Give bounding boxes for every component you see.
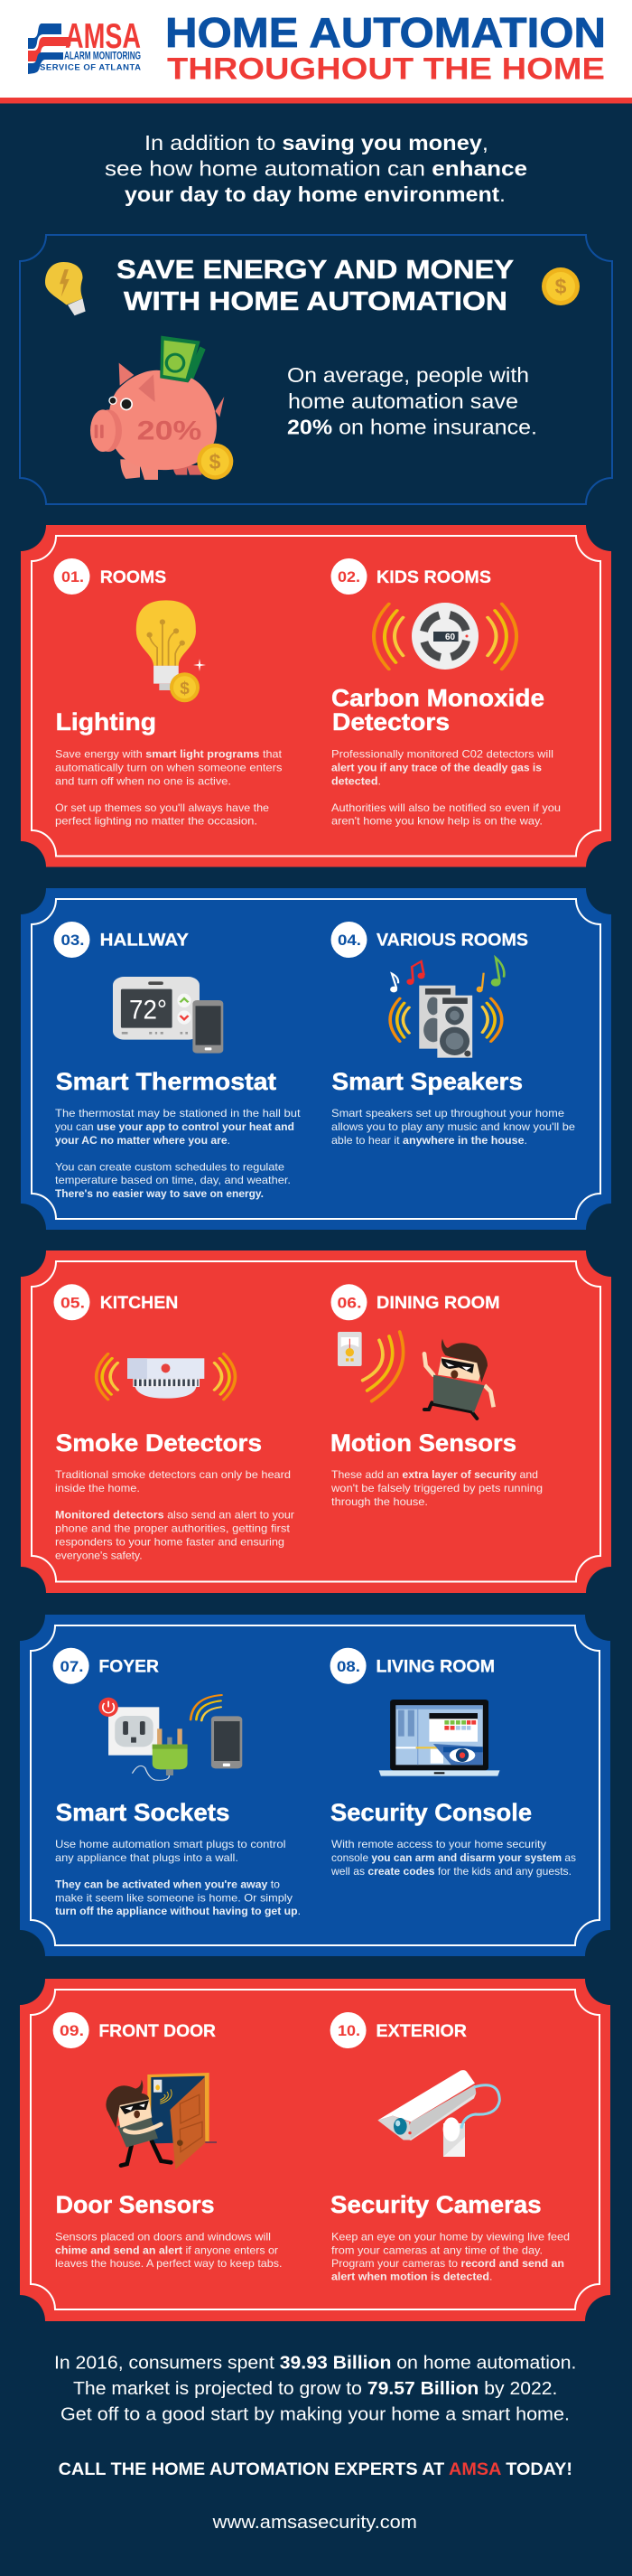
body: security cameras: Program your cameras to record and send an <box>331 2257 564 2270</box>
body: smart thermostat: The thermostat may be stationed in the hall but <box>55 1107 301 1119</box>
body: lighting: and turn off when no one is active. <box>55 775 231 788</box>
intro text: In addition to saving you money , <box>144 131 488 155</box>
body: carbon monoxide: Authorities will also be notified so even if you <box>331 801 561 814</box>
icon: smart socket <box>98 1695 242 1780</box>
intro text: your day to day home environment . <box>125 183 506 206</box>
badge 05 kitchen: 05. <box>60 1294 85 1312</box>
icon: smoke detector <box>97 1354 235 1400</box>
intro text: see how home automation can enhance <box>105 157 527 181</box>
body: security console: With remote access to your home security <box>331 1838 546 1850</box>
body: carbon monoxide: alert you if any trace of the deadly gas is <box>331 761 542 773</box>
body: door sensors: Sensors placed on doors and windows will <box>55 2230 271 2243</box>
heading: smart sockets: Smart Sockets <box>56 1799 229 1826</box>
body: smoke detectors: Traditional smoke detectors can only be heard <box>55 1468 291 1481</box>
icon: piggy coin: $ <box>209 450 221 473</box>
heading: save energy: WITH HOME AUTOMATION <box>124 287 507 316</box>
heading: security console: Security Console <box>330 1799 532 1826</box>
heading: motion sensors: Motion Sensors <box>330 1429 516 1457</box>
badge 03 hallway: HALLWAY <box>100 931 189 951</box>
badge 09 front door: FRONT DOOR <box>98 2021 216 2041</box>
body: motion sensors: won't be falsely triggered by pets running <box>330 1482 543 1494</box>
header band <box>0 0 632 103</box>
heading: save energy <box>116 256 514 316</box>
body: security cameras: from your cameras at any time of the day. <box>331 2243 543 2256</box>
body: smoke detectors: everyone's safety. <box>55 1549 143 1561</box>
website: www.amsasecurity.com <box>212 2512 417 2533</box>
body: smart sockets: Use home automation smart plugs to control <box>55 1838 285 1850</box>
title <box>165 9 606 87</box>
icon: security camera <box>377 2070 499 2157</box>
body: smart speakers: able to hear it anywhere in the house . <box>331 1134 527 1147</box>
body: lighting: Save energy with smart light programs that <box>55 748 283 761</box>
body: security console: well as create codes for the kids and any guests. <box>330 1865 572 1878</box>
icon: door sensor and burglar <box>106 2073 217 2169</box>
badge 08 living room: LIVING ROOM <box>376 1657 495 1677</box>
body: motion sensors <box>330 1468 543 1508</box>
icon: smart thermostat <box>113 977 223 1054</box>
heading: lighting: Lighting <box>56 708 156 735</box>
logo: AMSA Alarm Monitoring Service of Atlanta: SERVICE OF ATLANTA <box>40 62 141 72</box>
body: smart speakers: Smart speakers set up throughout your home <box>331 1107 564 1119</box>
icon: coin: $ <box>555 275 567 298</box>
badge 02 kids rooms: KIDS ROOMS <box>376 567 491 587</box>
badge 03 hallway <box>54 922 189 958</box>
title: THROUGHOUT THE HOME <box>167 52 605 87</box>
badge 01 rooms <box>54 558 166 595</box>
closing statistics text: In 2016, consumers spent 39.93 Billion on home automation. <box>54 2353 576 2374</box>
icon: coin <box>542 267 580 305</box>
icon: lighting bulb: $ <box>180 679 190 698</box>
panel: front door and exterior <box>20 1979 610 2321</box>
badge 05 kitchen <box>54 1284 178 1320</box>
badge 04 various rooms <box>330 922 528 958</box>
heading: save energy: SAVE ENERGY AND MONEY <box>116 256 514 285</box>
heading: carbon monoxide detectors: Carbon Monoxide <box>331 685 544 712</box>
body: motion sensors: These add an extra layer of security and <box>331 1468 538 1481</box>
body: smart sockets: They can be activated when you're away to <box>55 1878 280 1890</box>
closing statistics text: Get off to a good start by making your home a smart home. <box>60 2403 570 2425</box>
body: smart thermostat: you can use your app to control your heat and <box>55 1120 294 1133</box>
body: smart speakers <box>331 1107 575 1147</box>
body: smoke detectors: Monitored detectors also send an alert to your <box>55 1509 294 1522</box>
savings text: home automation save <box>288 389 518 413</box>
icon: smart thermostat: 72° <box>129 996 167 1026</box>
body: carbon monoxide: detected. <box>331 775 381 788</box>
badge 04 various rooms: 04. <box>338 932 361 949</box>
icon: security console laptop <box>379 1700 500 1776</box>
body: security console: console you can arm and disarm your system as <box>331 1851 576 1864</box>
icon: carbon monoxide detector: 60 <box>445 632 456 642</box>
badge 08 living room <box>330 1648 495 1684</box>
badge 04 various rooms: VARIOUS ROOMS <box>376 931 528 951</box>
body: smart thermostat: There's no easier way to save on energy. <box>55 1187 264 1200</box>
body: door sensors: leaves the house. A perfect way to keep tabs. <box>55 2257 282 2270</box>
body: smart thermostat: temperature based on time, day, and weather. <box>55 1174 291 1186</box>
body: smart thermostat: your AC no matter where you are. <box>55 1134 230 1147</box>
icon: carbon monoxide detector <box>374 603 516 670</box>
body: carbon monoxide: aren't home you know help is on the way. <box>331 815 543 828</box>
heading: carbon monoxide detectors: Detectors <box>332 708 450 735</box>
badge 10 exterior <box>330 2012 467 2048</box>
badge 07 foyer <box>53 1648 159 1684</box>
body: smart sockets: make it seem like someone is home. Or simply <box>55 1891 293 1904</box>
badge 08 living room: 08. <box>337 1658 360 1675</box>
icon: piggy bank <box>90 336 224 480</box>
body: smart thermostat: You can create custom schedules to regulate <box>55 1160 284 1173</box>
icon: lighting bulb <box>136 600 206 702</box>
body: door sensors: chime and send an alert if anyone enters or <box>55 2243 278 2256</box>
body: security cameras: Keep an eye on your home by viewing live feed <box>331 2230 570 2243</box>
heading: carbon monoxide detectors <box>331 685 544 735</box>
badge 01 rooms: ROOMS <box>100 567 166 587</box>
body: security cameras: alert when motion is detected . <box>331 2271 493 2283</box>
badge 09 front door <box>53 2012 216 2048</box>
icon: piggy bank: 20% <box>137 417 201 446</box>
badge 07 foyer: 07. <box>60 1658 83 1675</box>
badge 03 hallway: 03. <box>61 932 85 949</box>
panel: kitchen and dining room <box>21 1251 611 1593</box>
heading: security cameras: Security Cameras <box>330 2191 542 2218</box>
logo: AMSA Alarm Monitoring Service of Atlanta: ALARM MONITORING <box>64 52 141 62</box>
badge 06 dining room: DINING ROOM <box>376 1293 500 1313</box>
body: motion sensors: through the house. <box>331 1495 428 1508</box>
icon: smart speakers <box>390 958 504 1058</box>
closing statistics text <box>54 2353 576 2425</box>
call to action: CALL THE HOME AUTOMATION EXPERTS AT AMSA TODAY! <box>59 2460 572 2479</box>
body: smart thermostat <box>55 1107 301 1200</box>
body: lighting: perfect lighting no matter the occasion. <box>55 815 257 828</box>
badge 10 exterior: EXTERIOR <box>376 2021 467 2041</box>
badge 06 dining room: 06. <box>338 1294 361 1312</box>
icon: music notes <box>390 958 504 992</box>
icon: piggy coin <box>197 444 233 480</box>
icon: light bulb <box>45 262 86 315</box>
body: security console <box>330 1838 576 1878</box>
body: lighting <box>55 748 283 828</box>
badge 07 foyer: FOYER <box>98 1657 159 1677</box>
badge 05 kitchen: KITCHEN <box>100 1293 178 1313</box>
badge 02 kids rooms <box>330 558 491 595</box>
heading: door sensors: Door Sensors <box>56 2191 214 2218</box>
body: smoke detectors: phone and the proper authorities, getting first <box>55 1522 291 1535</box>
savings text: 20% on home insurance. <box>287 415 537 438</box>
body: smart sockets <box>55 1838 301 1917</box>
body: smart sockets: turn off the appliance without having to get up . <box>55 1905 301 1917</box>
heading: smart thermostat: Smart Thermostat <box>56 1068 276 1095</box>
panel: hallway and various rooms <box>21 888 611 1230</box>
badge 10 exterior: 10. <box>338 2022 360 2039</box>
body: smoke detectors: responders to your home faster and ensuring <box>55 1535 284 1548</box>
badge 01 rooms: 01. <box>61 568 84 585</box>
title: HOME AUTOMATION <box>165 9 606 56</box>
body: smoke detectors <box>55 1468 294 1561</box>
icon: motion sensor and burglar <box>338 1332 494 1419</box>
body: smart speakers: allows you to play any music and know you'll be <box>331 1120 575 1133</box>
body: smoke detectors: inside the home. <box>55 1482 140 1494</box>
panel: save energy and money <box>20 235 612 504</box>
heading: smart speakers: Smart Speakers <box>332 1068 523 1095</box>
closing statistics text: The market is projected to grow to 79.57 Billion by 2022. <box>73 2378 557 2399</box>
savings text: On average, people with <box>287 363 529 387</box>
body: lighting: automatically turn on when someone enters <box>55 761 282 773</box>
body: carbon monoxide <box>331 748 561 828</box>
badge 09 front door: 09. <box>60 2022 84 2039</box>
body: smart sockets: any appliance that plugs into a wall. <box>55 1851 238 1864</box>
panel: foyer and living room <box>20 1615 610 1956</box>
body: carbon monoxide: Professionally monitored C02 detectors will <box>331 748 553 761</box>
body: security cameras <box>331 2230 570 2283</box>
logo: AMSA Alarm Monitoring Service of Atlanta <box>28 17 141 74</box>
body: door sensors <box>55 2230 282 2270</box>
intro text <box>105 131 527 206</box>
heading: smoke detectors: Smoke Detectors <box>56 1429 262 1457</box>
panel: rooms and kids rooms <box>21 525 611 867</box>
savings text <box>287 363 537 438</box>
badge 06 dining room <box>330 1284 500 1320</box>
body: lighting: Or set up themes so you'll always have the <box>55 801 269 814</box>
logo: AMSA Alarm Monitoring Service of Atlanta: AMSA <box>65 17 141 56</box>
badge 02 kids rooms: 02. <box>338 568 360 585</box>
